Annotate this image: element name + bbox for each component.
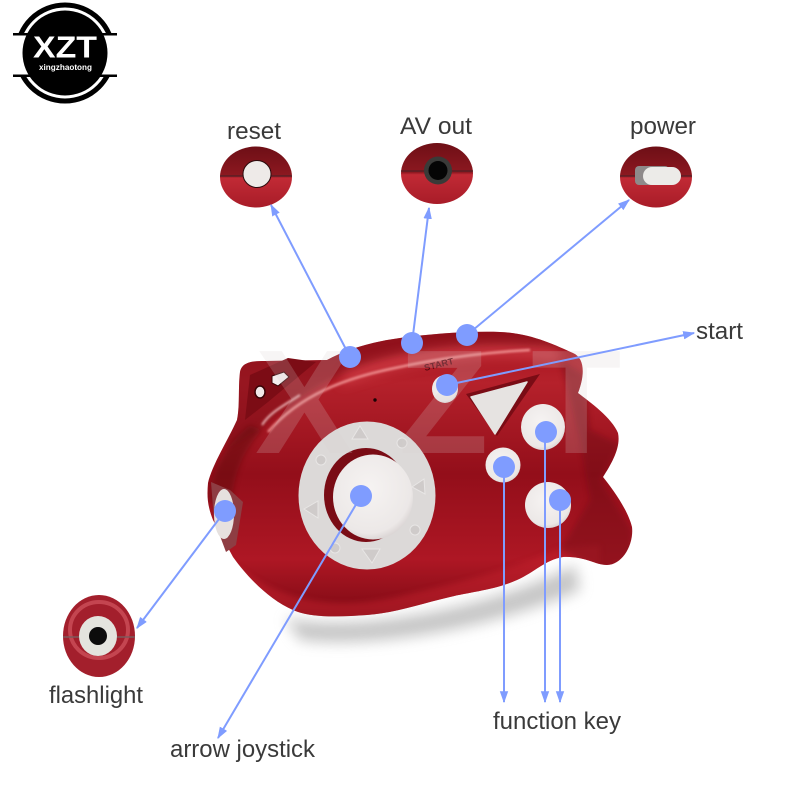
- triangle button: [466, 374, 540, 436]
- logo: XZT xingzhaotong badge: [13, 5, 117, 101]
- logo: XZT xingzhaotong badge: XZT: [33, 30, 97, 64]
- joystick cap: [333, 454, 413, 540]
- inset: AV out: [401, 143, 473, 204]
- joystick well: [324, 448, 408, 542]
- arrow: function key A: [503, 467, 505, 702]
- arrow: function key B: [544, 432, 546, 702]
- body shell: [208, 332, 632, 616]
- arrow: power: [467, 200, 629, 335]
- callout lines: [137, 200, 694, 738]
- label: function key: function key: [493, 708, 621, 735]
- arrow: function key C: [559, 500, 561, 702]
- arrow: reset: [271, 205, 350, 357]
- inset: flashlight: [63, 595, 135, 677]
- label: AV out: AV out: [400, 113, 472, 140]
- lanyard loop holes: [245, 358, 316, 420]
- controller body: [208, 320, 632, 625]
- arrow: flashlight: [137, 511, 225, 628]
- start button: [432, 375, 458, 403]
- label: start: start: [696, 318, 743, 345]
- arrow: start: [447, 333, 694, 385]
- arrow: joystick: [218, 496, 361, 738]
- label: power: power: [630, 113, 696, 140]
- function button B: [521, 404, 565, 450]
- label: arrow joystick: arrow joystick: [170, 736, 316, 763]
- logo: XZT xingzhaotong badge: xingzhaotong: [39, 62, 92, 72]
- inset: power: [620, 146, 692, 208]
- callout dots: [214, 324, 571, 522]
- inset: reset: [220, 146, 292, 208]
- START print: START: [423, 356, 455, 373]
- label: flashlight: flashlight: [49, 682, 143, 709]
- small hole: [373, 398, 377, 402]
- function button C: [525, 482, 571, 528]
- arrow: AV out: [412, 208, 429, 343]
- flashlight lens: [211, 482, 243, 552]
- watermark XZT: XZT: [255, 320, 621, 485]
- product shadow: [285, 565, 580, 642]
- label: reset: reset: [227, 118, 281, 145]
- body reflections: [208, 320, 632, 625]
- ring direction markers: [304, 426, 425, 563]
- function button A: [486, 448, 520, 482]
- joystick ring: [298, 422, 436, 570]
